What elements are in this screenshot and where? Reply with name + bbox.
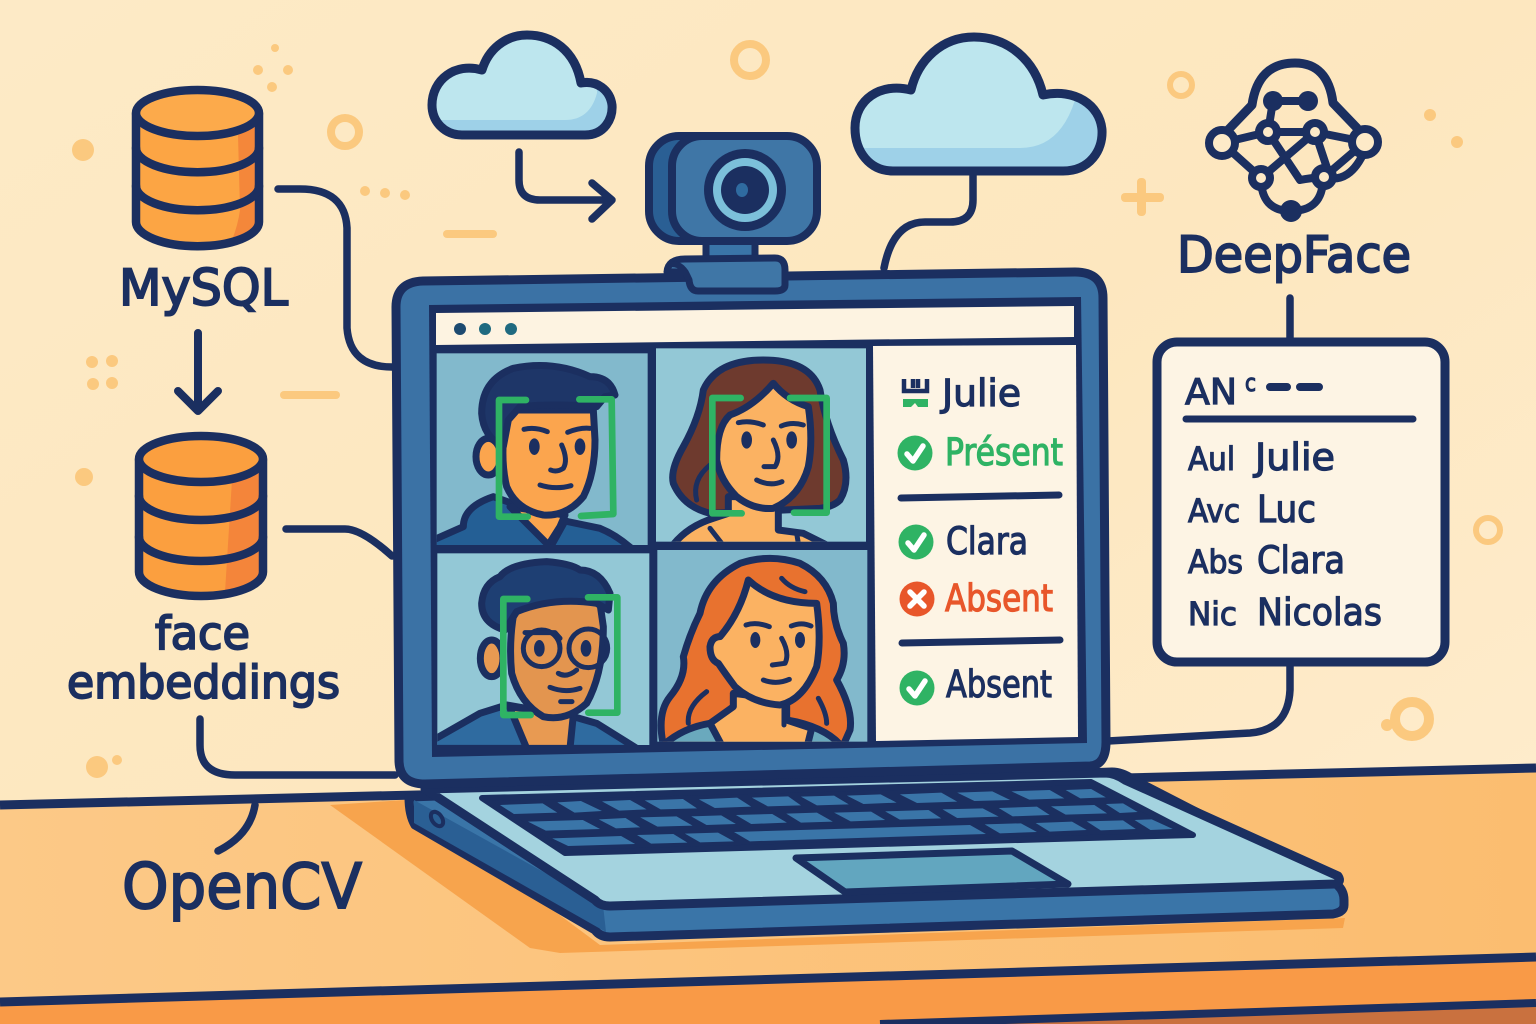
- row: Clara: [898, 520, 1028, 563]
- row: Présent: Présent: [945, 431, 1063, 474]
- attendance panel: [873, 345, 1078, 741]
- names table: [1188, 436, 1382, 634]
- video call grid: [433, 348, 867, 748]
- decorative dots and rings: [72, 44, 1500, 778]
- label: DeepFace: DeepFace: [1177, 226, 1411, 284]
- laptop lid: [396, 272, 1106, 784]
- names table: Nicolas: [1257, 591, 1382, 634]
- icon: large cloud: [850, 30, 1110, 180]
- panel heading: AN: [1185, 372, 1237, 413]
- names table: Clara: [1257, 539, 1345, 582]
- row: Julie: [903, 372, 1021, 415]
- browser bar: [436, 306, 1074, 345]
- names table: Nic: [1188, 595, 1237, 633]
- row: Présent: [898, 431, 1063, 474]
- label: face embeddings: [67, 607, 340, 709]
- row: Absent (red): Absent: [945, 577, 1053, 620]
- panel: names list: [1157, 342, 1445, 662]
- arrow: MySQL to embeddings: [178, 333, 218, 411]
- person: brown hair: [656, 348, 866, 547]
- icon: small cloud: [425, 30, 620, 140]
- label: face embeddings: embeddings: [67, 656, 340, 709]
- panel heading: [1185, 369, 1319, 413]
- row: Absent: Absent: [946, 663, 1052, 706]
- row: Clara: Clara: [946, 520, 1028, 563]
- names table: Julie: [1253, 436, 1335, 479]
- icon: DeepFace network: [1209, 63, 1378, 222]
- screen: [429, 297, 1087, 757]
- row: Julie: Julie: [940, 372, 1021, 415]
- desk: [0, 765, 1536, 1024]
- person: dark hair hoodie: [433, 353, 648, 550]
- laptop base: [409, 772, 1344, 937]
- names table: Abs: [1188, 543, 1243, 581]
- icon: face embeddings database: [139, 436, 263, 596]
- person: red hair: [657, 550, 867, 748]
- label: MySQL: MySQL: [119, 259, 288, 317]
- label: OpenCV: OpenCV: [122, 850, 362, 923]
- names table: Luc: [1257, 488, 1316, 531]
- panel heading: c: [1245, 369, 1256, 397]
- connector lines: [200, 172, 1290, 851]
- icon: webcam: [649, 136, 817, 291]
- label: face embeddings: face: [155, 607, 250, 660]
- row: Absent: [900, 663, 1052, 706]
- keyboard: [482, 782, 1193, 853]
- names table: Avc: [1188, 492, 1240, 530]
- icon: MySQL database: [136, 90, 259, 246]
- trackpad: [796, 851, 1068, 892]
- person: glasses: [433, 553, 649, 748]
- arrow: cloud to webcam: [519, 152, 612, 219]
- row: Absent (red): [900, 577, 1053, 620]
- laptop: [396, 272, 1344, 937]
- names table: Aul: [1188, 440, 1235, 478]
